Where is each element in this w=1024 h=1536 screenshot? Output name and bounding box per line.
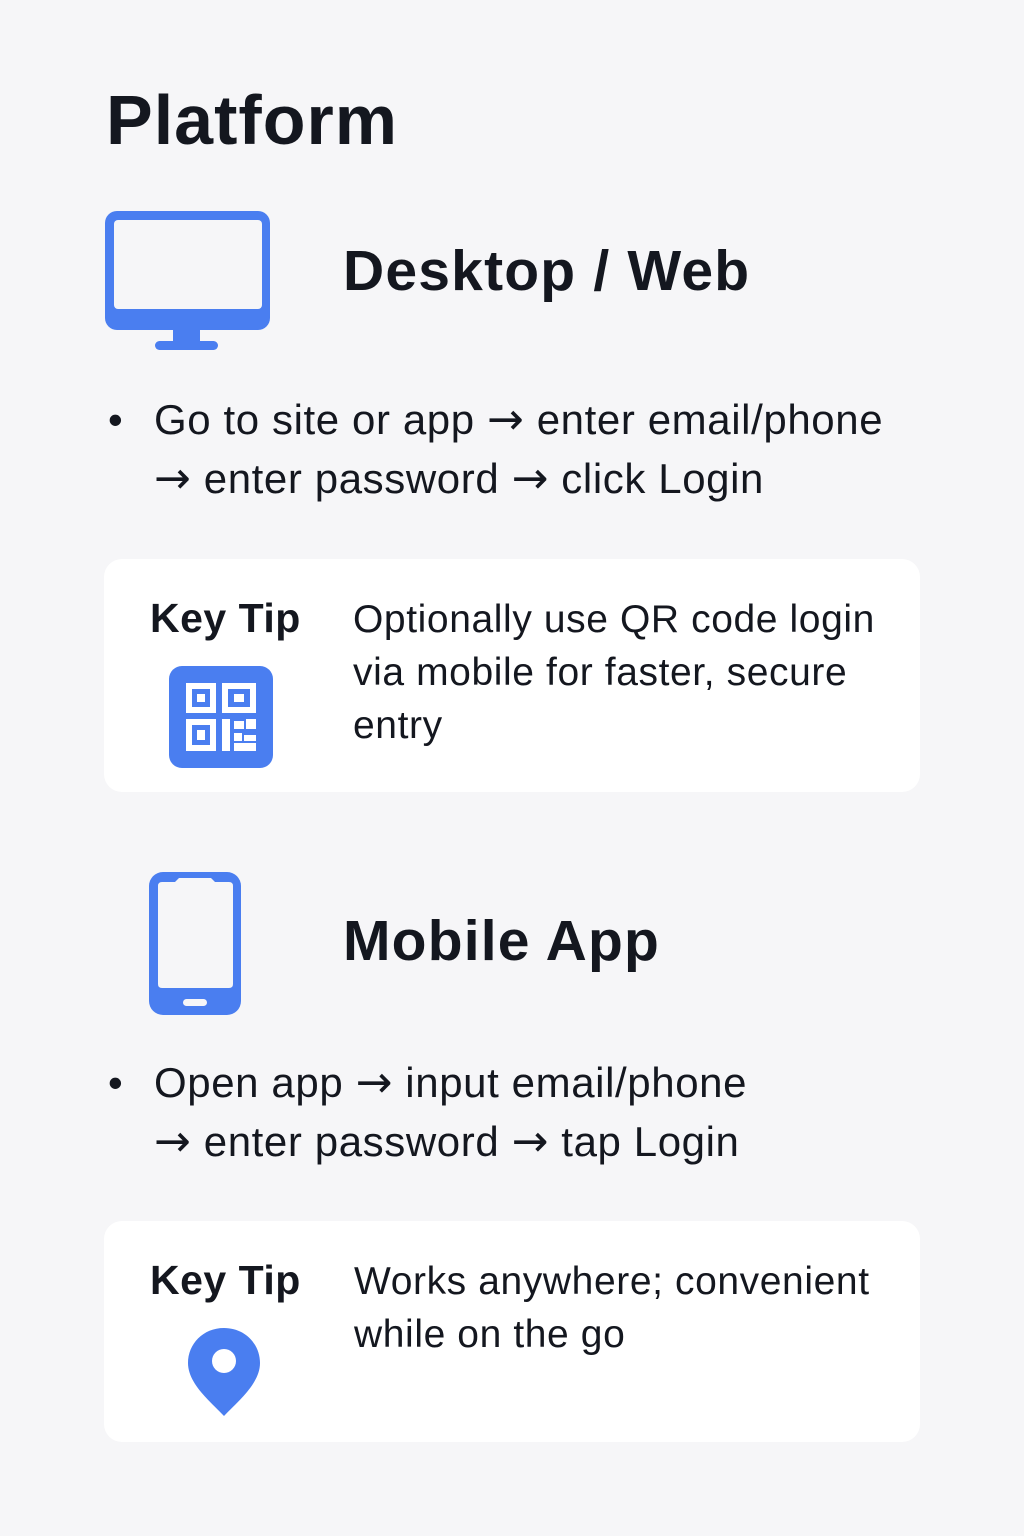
bullet text: mobile steps — [108, 1057, 747, 1167]
icon: location pin — [188, 1328, 260, 1416]
tip text: Works anywhere; convenient — [354, 1260, 870, 1303]
bullet text: desktop steps: • — [108, 396, 123, 443]
bullet text: desktop steps: Go to site or app → enter email/phone — [154, 394, 883, 445]
heading: Desktop / Web: Desktop / Web — [343, 239, 750, 303]
bullet text: mobile steps: → enter password → tap Login — [154, 1116, 740, 1167]
tip text: Optionally use QR code login — [353, 598, 875, 641]
bullet text: mobile steps: Open app → input email/phone — [154, 1057, 747, 1108]
heading: Mobile App: Mobile App — [343, 909, 660, 973]
tip text: while on the go — [354, 1313, 625, 1356]
icon: desktop monitor — [105, 211, 270, 350]
card: mobile key tip — [104, 1221, 920, 1442]
bullet text: mobile steps: • — [108, 1059, 123, 1106]
label: Key Tip: Key Tip — [150, 1257, 301, 1303]
tip text: via mobile for faster, secure — [353, 651, 847, 694]
icon: QR code — [169, 666, 273, 768]
icon: mobile phone — [149, 872, 241, 1015]
bullet text: desktop steps: → enter password → click Login — [154, 453, 764, 504]
tip text — [354, 1260, 870, 1356]
card: desktop key tip — [104, 559, 920, 792]
label: Key Tip: Key Tip — [150, 595, 301, 641]
title: Platform — [106, 81, 398, 159]
bullet text: desktop steps — [108, 394, 883, 504]
tip text — [353, 598, 875, 747]
tip text: entry — [353, 704, 443, 747]
